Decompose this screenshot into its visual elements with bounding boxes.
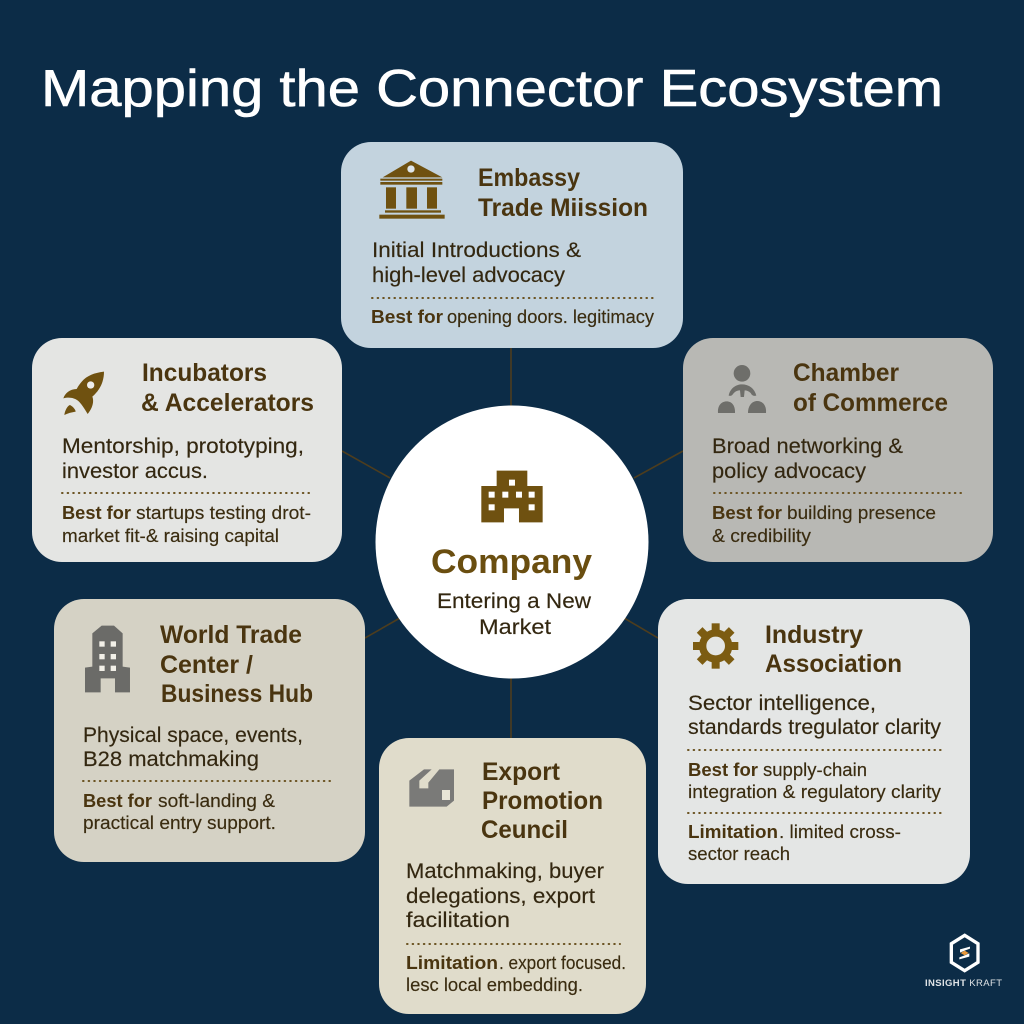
description: Broad networking & <box>712 435 903 458</box>
icon: gear <box>693 623 738 669</box>
panel: industry association <box>658 599 970 884</box>
limitation <box>406 952 626 995</box>
best for: & credibility <box>712 525 812 546</box>
description: Sector intelligence, <box>688 692 876 715</box>
description: Initial Introductions & <box>372 239 581 262</box>
best for: supply-chain <box>763 759 867 780</box>
limitation: . export focused. <box>499 952 626 973</box>
heading <box>478 164 648 222</box>
central hub: company <box>376 406 648 678</box>
best for: Best for <box>712 502 782 523</box>
description <box>406 860 604 932</box>
panel: incubators and accelerators <box>32 338 342 562</box>
heading: of Commerce <box>793 389 948 417</box>
logo: insight kraft: INSIGHT KRAFT <box>925 978 1002 989</box>
heading: Association <box>765 650 902 678</box>
hub title: Company <box>431 543 592 581</box>
panel: embassy trade mission <box>341 142 683 348</box>
heading: & Accelerators <box>141 389 314 417</box>
hub subtitle <box>437 590 592 639</box>
heading: Promotion <box>482 787 603 815</box>
best for <box>62 502 311 546</box>
heading: Industry <box>765 621 863 649</box>
heading: World Trade <box>160 621 302 649</box>
heading: Incubators <box>142 359 267 387</box>
icon: export tag <box>409 769 454 807</box>
description: Physical space, events, <box>83 724 303 747</box>
best for: Best for <box>62 502 131 523</box>
limitation: Limitation <box>406 952 498 973</box>
best for: Best for <box>83 790 152 811</box>
description: investor accus. <box>62 460 208 483</box>
heading: Center / <box>160 651 253 679</box>
icon: company building <box>481 471 543 522</box>
description <box>83 724 303 771</box>
best for: startups testing drot- <box>136 502 311 523</box>
description: Matchmaking, buyer <box>406 860 604 883</box>
description: Mentorship, prototyping, <box>62 435 304 458</box>
icon: rocket <box>63 372 104 415</box>
heading: Ceuncil <box>481 816 568 844</box>
limitation: lesc local embedding. <box>406 974 583 995</box>
icon: tower <box>85 626 130 692</box>
description: policy advocacy <box>712 460 867 483</box>
best for: soft-landing & <box>158 790 276 811</box>
description: delegations, export <box>406 885 595 908</box>
best for: Best for <box>688 759 758 780</box>
description <box>712 435 903 483</box>
best for <box>688 759 942 802</box>
best for <box>712 502 936 546</box>
heading: Embassy <box>478 164 580 192</box>
description <box>688 692 942 739</box>
description <box>372 239 581 287</box>
limitation <box>688 821 901 864</box>
description: B28 matchmaking <box>83 748 259 771</box>
limitation: . limited cross- <box>779 821 901 842</box>
heading <box>793 359 948 417</box>
best for: practical entry support. <box>83 812 276 833</box>
description: facilitation <box>406 909 510 932</box>
heading <box>160 621 313 708</box>
limitation: sector reach <box>688 843 790 864</box>
heading: Business Hub <box>161 680 313 708</box>
panel: chamber of commerce <box>683 338 993 562</box>
icon: embassy building <box>379 161 445 219</box>
best for: building presence <box>787 502 936 523</box>
best for: opening doors. legitimacy <box>447 306 655 327</box>
best for: Best for <box>371 306 443 327</box>
limitation: Limitation <box>688 821 778 842</box>
description <box>62 435 304 483</box>
heading: Chamber <box>793 359 899 387</box>
best for <box>83 790 276 833</box>
hub subtitle: Market <box>479 616 551 639</box>
heading <box>141 359 314 417</box>
description: standards tregulator clarity <box>688 716 942 739</box>
description: high-level advocacy <box>372 264 566 287</box>
heading <box>765 621 902 678</box>
panel: export promotion council <box>379 738 646 1014</box>
heading <box>481 758 603 844</box>
icon: people network <box>718 365 766 413</box>
best for: integration & regulatory clarity <box>688 781 942 802</box>
panel: world trade center <box>54 599 365 862</box>
connector lines <box>342 348 683 738</box>
best for: market fit-& raising capital <box>62 525 279 546</box>
heading: Trade Miission <box>478 194 648 222</box>
title: Mapping the Connector Ecosystem <box>41 60 943 118</box>
logo: insight kraft <box>925 935 1002 989</box>
heading: Export <box>482 758 561 786</box>
hub subtitle: Entering a New <box>437 590 592 613</box>
